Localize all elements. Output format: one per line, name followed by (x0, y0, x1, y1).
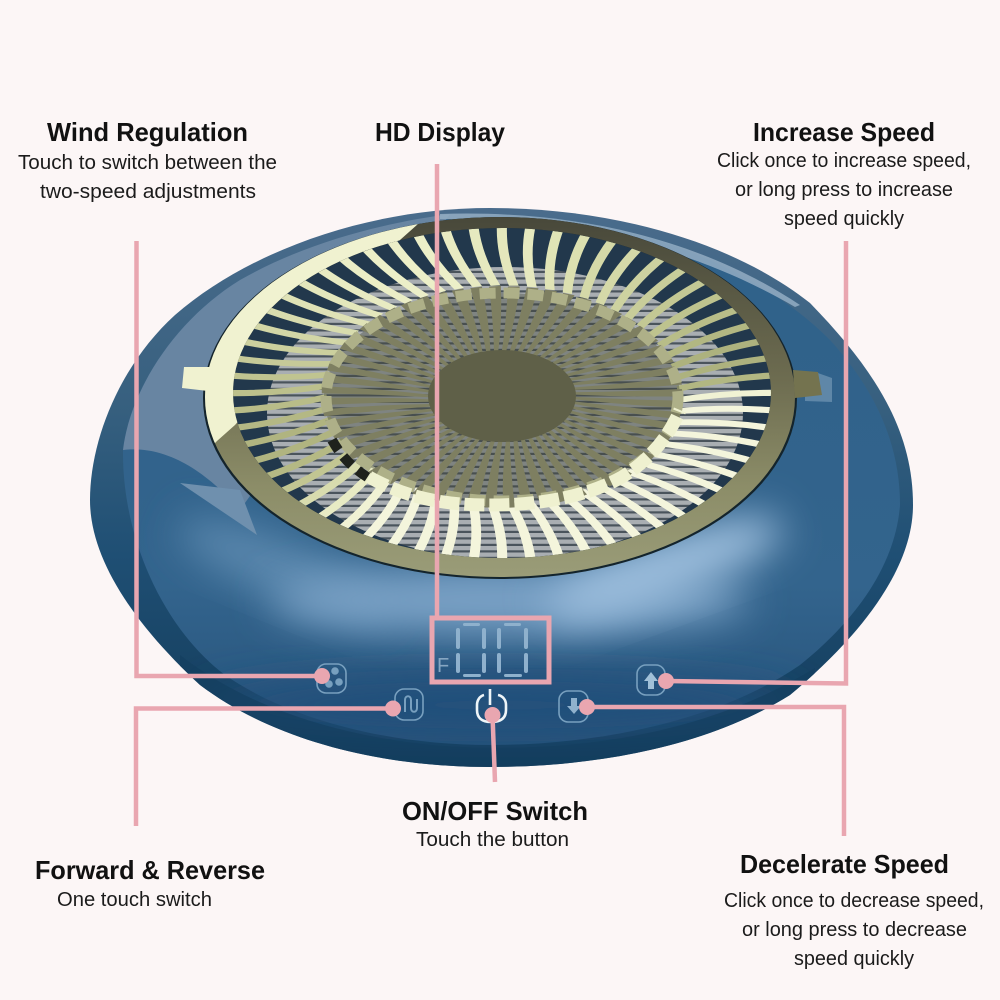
right tab ghost (805, 372, 832, 402)
upper-left light face (123, 214, 450, 510)
seven-segment display (437, 623, 528, 677)
icon: wind button (317, 664, 346, 693)
label: decelerate speed: Decelerate Speed (740, 849, 949, 879)
lower dark band (200, 675, 800, 735)
leader: decelerate speed (587, 707, 844, 836)
label: wind regulation (18, 117, 277, 203)
louvers (267, 267, 743, 559)
label: decelerate speed: or long press to decrease (742, 919, 967, 941)
body shading (123, 214, 900, 790)
first digit (456, 623, 486, 677)
label: HD display: HD Display (375, 117, 506, 147)
face highlight center (270, 566, 750, 634)
label: on/off switch: Touch the button (416, 829, 569, 851)
right tab (793, 370, 822, 398)
bottom rim dark (180, 666, 814, 767)
outer blades (225, 223, 779, 563)
product: fan body (90, 208, 913, 790)
callout lines (136, 164, 846, 836)
face highlight right (537, 497, 793, 639)
display F label: F (437, 655, 449, 677)
center hub (428, 350, 576, 442)
icon: decrease button (559, 691, 588, 722)
label: on/off switch: ON/OFF Switch (402, 796, 588, 826)
leader: HD display (435, 164, 439, 618)
callout dots (314, 668, 674, 723)
middle ring dark segments (332, 440, 372, 480)
outer ring (205, 217, 795, 577)
left triangle reflection (180, 483, 257, 535)
label: forward and reverse: One touch switch (57, 889, 212, 911)
label: decelerate speed: Click once to decrease speed, (724, 890, 984, 912)
inner face (123, 215, 900, 745)
second digit (497, 623, 528, 677)
label: decelerate speed (724, 849, 984, 970)
label: increase speed (717, 117, 971, 230)
label: wind regulation: two-speed adjustments (40, 181, 256, 203)
label: increase speed: Click once to increase speed, (717, 150, 971, 172)
label: forward and reverse: Forward & Reverse (35, 855, 265, 885)
left tab (182, 367, 210, 391)
label: increase speed: speed quickly (784, 208, 904, 230)
icon: increase button (637, 665, 665, 695)
middle ring lit arc (369, 410, 680, 505)
HD display highlight box (432, 618, 549, 682)
grille backing (233, 228, 771, 558)
body shell (90, 208, 913, 767)
label: wind regulation: Touch to switch between the (18, 152, 277, 174)
leader: on/off switch (492, 715, 495, 782)
label: on/off switch (402, 796, 588, 851)
label: forward and reverse (35, 855, 265, 911)
leader: increase speed (666, 241, 846, 684)
outer ring lit section (205, 224, 418, 444)
inner blades (321, 286, 683, 508)
label: increase speed: Increase Speed (753, 117, 935, 147)
label: increase speed: or long press to increase (735, 179, 953, 201)
inner zone shade (324, 293, 680, 501)
top rim highlight (440, 214, 800, 307)
leader: forward and reverse (136, 708, 393, 826)
label: wind regulation: Wind Regulation (47, 117, 248, 147)
fan grille (182, 217, 832, 579)
label: decelerate speed: speed quickly (794, 948, 914, 970)
icon: power button (477, 689, 506, 722)
middle ring segments (326, 293, 678, 501)
leader: wind regulation (136, 241, 322, 676)
icon: reverse button (395, 689, 423, 720)
control panel (317, 623, 665, 722)
face highlight left (174, 506, 362, 614)
ring shadow (203, 217, 797, 579)
